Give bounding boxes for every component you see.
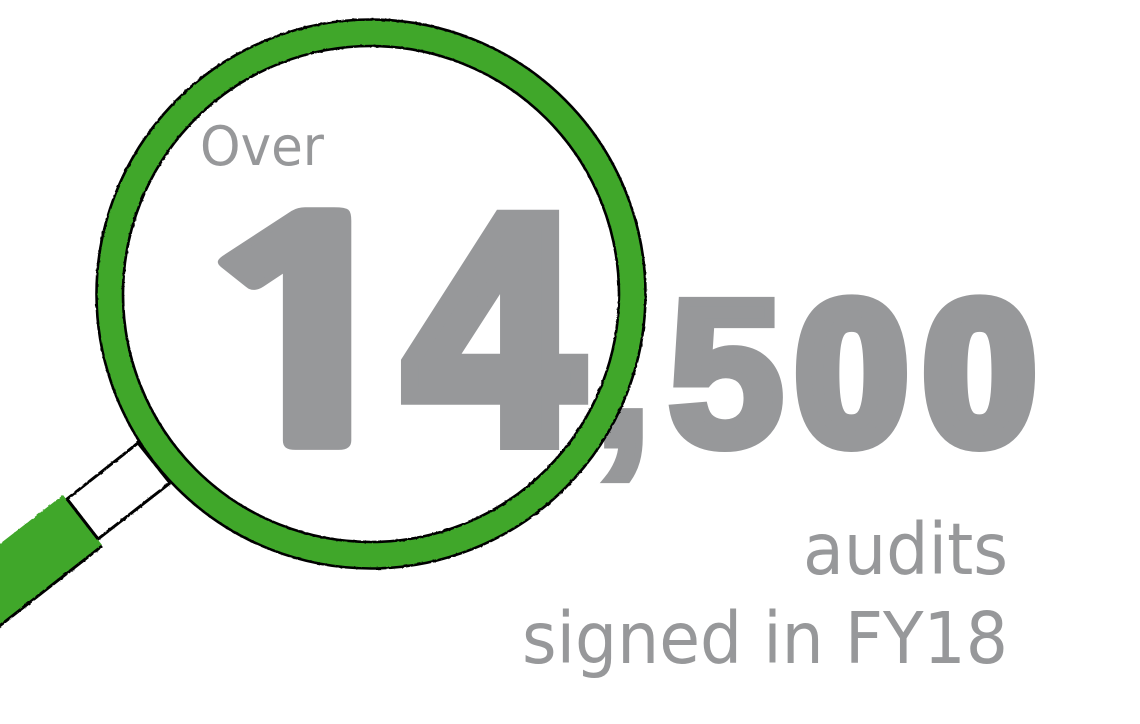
text: Over: Over: [200, 115, 325, 178]
magnifier handle neck: [67, 443, 170, 539]
magnifier ring: [96, 20, 646, 568]
text: signed in FY18: signed in FY18: [522, 597, 1008, 680]
comma: ,: [592, 243, 654, 493]
magnifier handle grip: [0, 495, 102, 649]
icon: magnifying glass: [0, 20, 646, 649]
digit 4: 4: [405, 149, 583, 510]
digits 00: 00: [796, 262, 1035, 485]
big number: 14: [176, 149, 583, 510]
digit 5: 5: [668, 258, 784, 490]
text: audits: audits: [803, 508, 1008, 591]
big number: ,500: [592, 243, 1035, 493]
digit 1: 1: [176, 186, 440, 491]
